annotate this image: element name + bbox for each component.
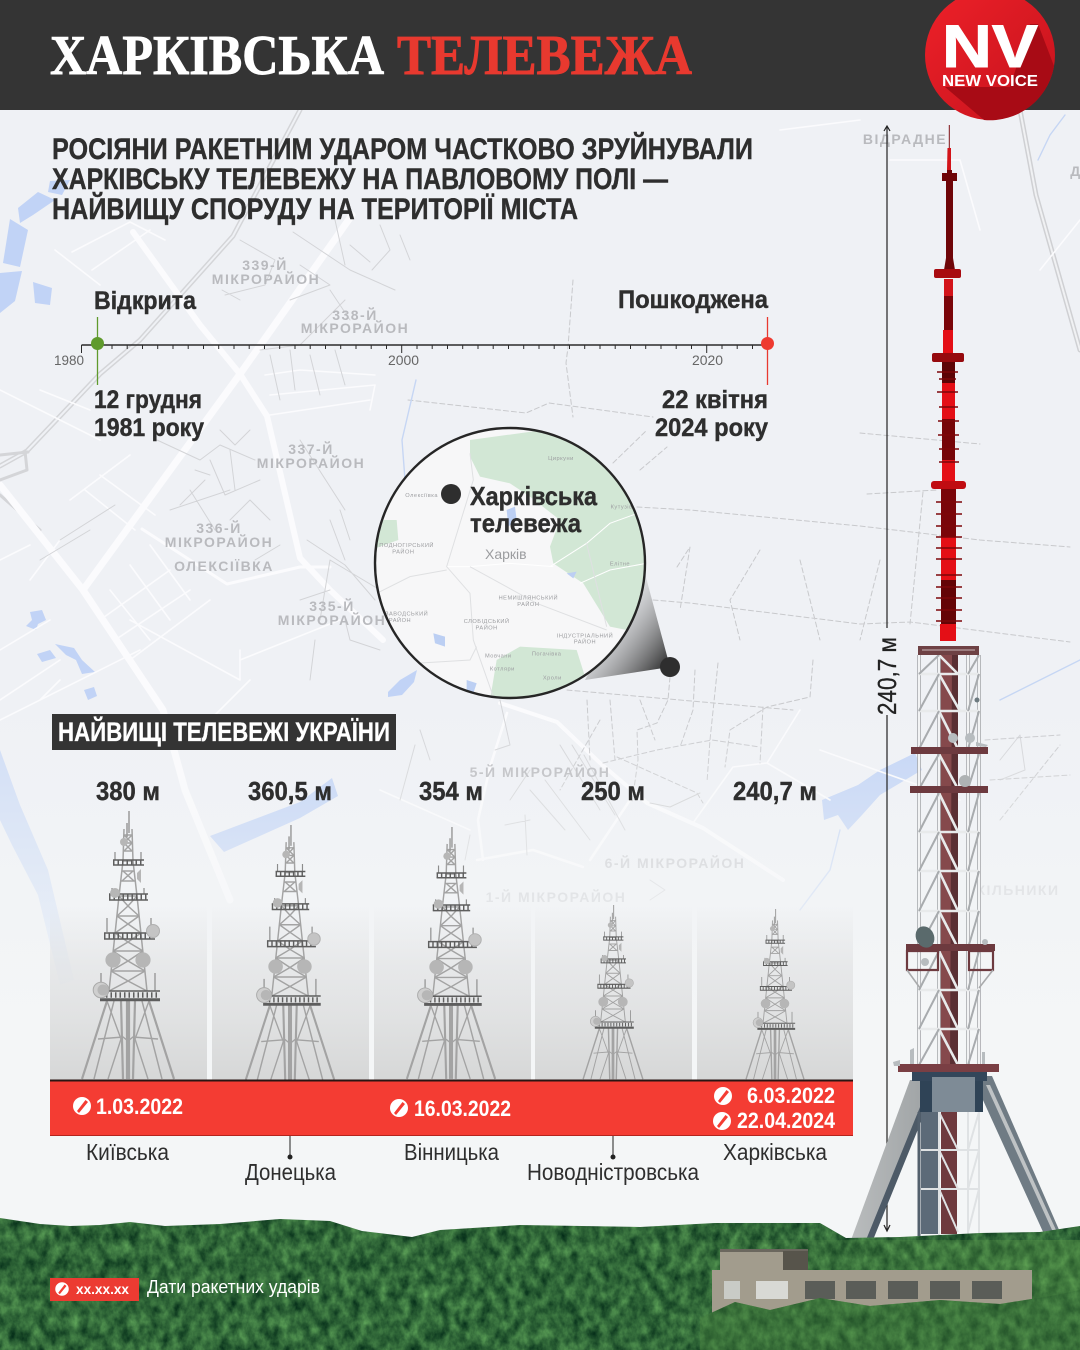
location callout wedge [585, 570, 680, 680]
inset map circle: РАЙОН [517, 600, 539, 608]
intro heading: ХАРКІВСЬКУ ТЕЛЕВЕЖУ НА ПАВЛОВОМУ ПОЛІ — [52, 163, 668, 196]
map labels: 5-Й МІКРОРАЙОН [470, 763, 610, 780]
roads [0, 110, 1080, 910]
height values: 360,5 м [248, 776, 332, 806]
TV tower marker: Харківська [470, 481, 597, 511]
inset map circle: Циркуни [548, 456, 574, 462]
legend [50, 1277, 320, 1301]
inset map city label: Харків [485, 546, 527, 562]
red strike dates bar: 16.03.2022 [414, 1096, 511, 1121]
foreground trees [700, 1290, 1080, 1350]
map labels: МІКРОРАЙОН [278, 611, 386, 628]
timeline: 22 квітня [662, 386, 768, 414]
inset map circle: Погачівка [532, 652, 562, 658]
intro heading: РОСІЯНИ РАКЕТНИМ УДАРОМ ЧАСТКОВО ЗРУЙНУВАЛИ [52, 132, 753, 166]
title: ТЕЛЕВЕЖА [397, 25, 693, 87]
timeline: 12 грудня [94, 386, 202, 414]
red strike dates bar: 1.03.2022 [96, 1094, 183, 1119]
height values: 380 м [96, 776, 160, 806]
inset map circle: ЗАВОДСЬКИЙ [385, 610, 428, 618]
tower names: Київська [86, 1139, 169, 1165]
tower: Donetsk [246, 825, 334, 1080]
intro heading: НАЙВИЩУ СПОРУДУ НА ТЕРИТОРІЇ МІСТА [52, 192, 578, 226]
logo NV New Voice: NV [942, 13, 1038, 80]
logo NV New Voice: NEW VOICE [942, 73, 1038, 90]
red strike dates bar [50, 1080, 853, 1136]
inset map circle: Котляри [490, 667, 515, 673]
timeline: Пошкоджена [618, 286, 769, 314]
timeline [54, 286, 774, 442]
map labels: 335-Й [309, 597, 355, 614]
main tower: lattice and core [893, 646, 999, 1072]
inset map circle: Олексіївка [405, 493, 438, 499]
main tower: red upper antenna [931, 125, 966, 641]
timeline: 2024 року [655, 414, 768, 442]
tower names: Харківська [723, 1139, 827, 1165]
height values: 354 м [419, 776, 483, 806]
title: ХАРКІВСЬКА [50, 25, 384, 87]
inset map circle: РАЙОН [392, 547, 414, 555]
inset map circle: РАЙОН [574, 638, 596, 646]
title [50, 25, 693, 87]
height values [96, 776, 817, 806]
timeline: 1980 [54, 352, 84, 368]
inset map circle: НЕМИШЛЯНСЬКИЙ [499, 593, 558, 601]
legend: xx.xx.xx [76, 1281, 129, 1297]
section heading: НАЙВИЩІ ТЕЛЕВЕЖІ УКРАЇНИ [58, 716, 390, 747]
tower: Kharkiv [746, 909, 804, 1079]
map labels: 336-Й [196, 519, 242, 536]
TV tower marker [441, 481, 597, 538]
height dimension arrow [872, 126, 902, 1231]
main tower: concrete base and legs [851, 1072, 1060, 1240]
timeline: 1981 року [94, 414, 204, 442]
tower names: Новодністровська [527, 1159, 699, 1185]
timeline: 2000 [388, 352, 419, 368]
tower: Novodnistrovsk [583, 905, 643, 1079]
tower names: Донецька [245, 1159, 336, 1185]
map labels: ВІДРАДНЕ [863, 131, 947, 147]
map labels: ОЛЕКСІЇВКА [174, 558, 274, 574]
height values: 250 м [581, 776, 645, 806]
tower: Vinnytsia [407, 827, 495, 1079]
height dimension arrow: 240,7 м [872, 637, 902, 715]
legend: Дати ракетних ударів [147, 1277, 320, 1297]
red strike dates bar: 22.04.2024 [737, 1108, 836, 1133]
map labels: 6-Й МІКРОРАЙОН [605, 854, 745, 871]
grey column panels [50, 905, 853, 1080]
inset map circle: СЛОБІДСЬКИЙ [464, 617, 510, 625]
inset map circle: Кутузівка [611, 505, 640, 511]
water bodies [0, 180, 922, 985]
map labels: 1-Й МІКРОРАЙОН [486, 888, 626, 905]
timeline: 2020 [692, 352, 723, 368]
inset map circle: Хроли [543, 676, 562, 682]
map labels: 339-Й [242, 256, 288, 273]
TV tower marker: телевежа [470, 508, 581, 538]
inset map circle: ПОДНОГІРСЬКИЙ [379, 541, 434, 549]
map labels: МІКРОРАЙОН [212, 270, 320, 287]
map labels [165, 131, 1080, 905]
map labels: МІКРОРАЙОН [165, 533, 273, 550]
red strike dates bar: 6.03.2022 [747, 1083, 835, 1108]
tower names: Вінницька [404, 1139, 499, 1165]
building [712, 1249, 1032, 1320]
timeline: Відкрита [94, 287, 197, 315]
tower: Kyiv [82, 811, 174, 1079]
inset map circle [373, 428, 650, 700]
map labels: МІКРОРАЙОН [301, 319, 409, 336]
forest [0, 1218, 1080, 1350]
tower names [86, 1136, 827, 1185]
inset map circle: Мовчани [485, 653, 512, 659]
inset map circle: ІНДУСТРІАЛЬНИЙ [557, 631, 613, 639]
intro heading [52, 132, 753, 226]
inset map circle: РАЙОН [476, 623, 498, 631]
logo NV New Voice [925, 0, 1055, 120]
inset map circle: РАЙОН [389, 616, 411, 624]
height values: 240,7 м [733, 776, 817, 806]
map labels: 338-Й [332, 306, 378, 323]
map labels: 337-Й [288, 440, 334, 457]
header bar [0, 0, 1080, 110]
map labels: КІЛЬНИКИ [976, 882, 1060, 898]
map labels: МІКРОРАЙОН [257, 454, 365, 471]
inset map circle: Елітне [610, 561, 630, 567]
